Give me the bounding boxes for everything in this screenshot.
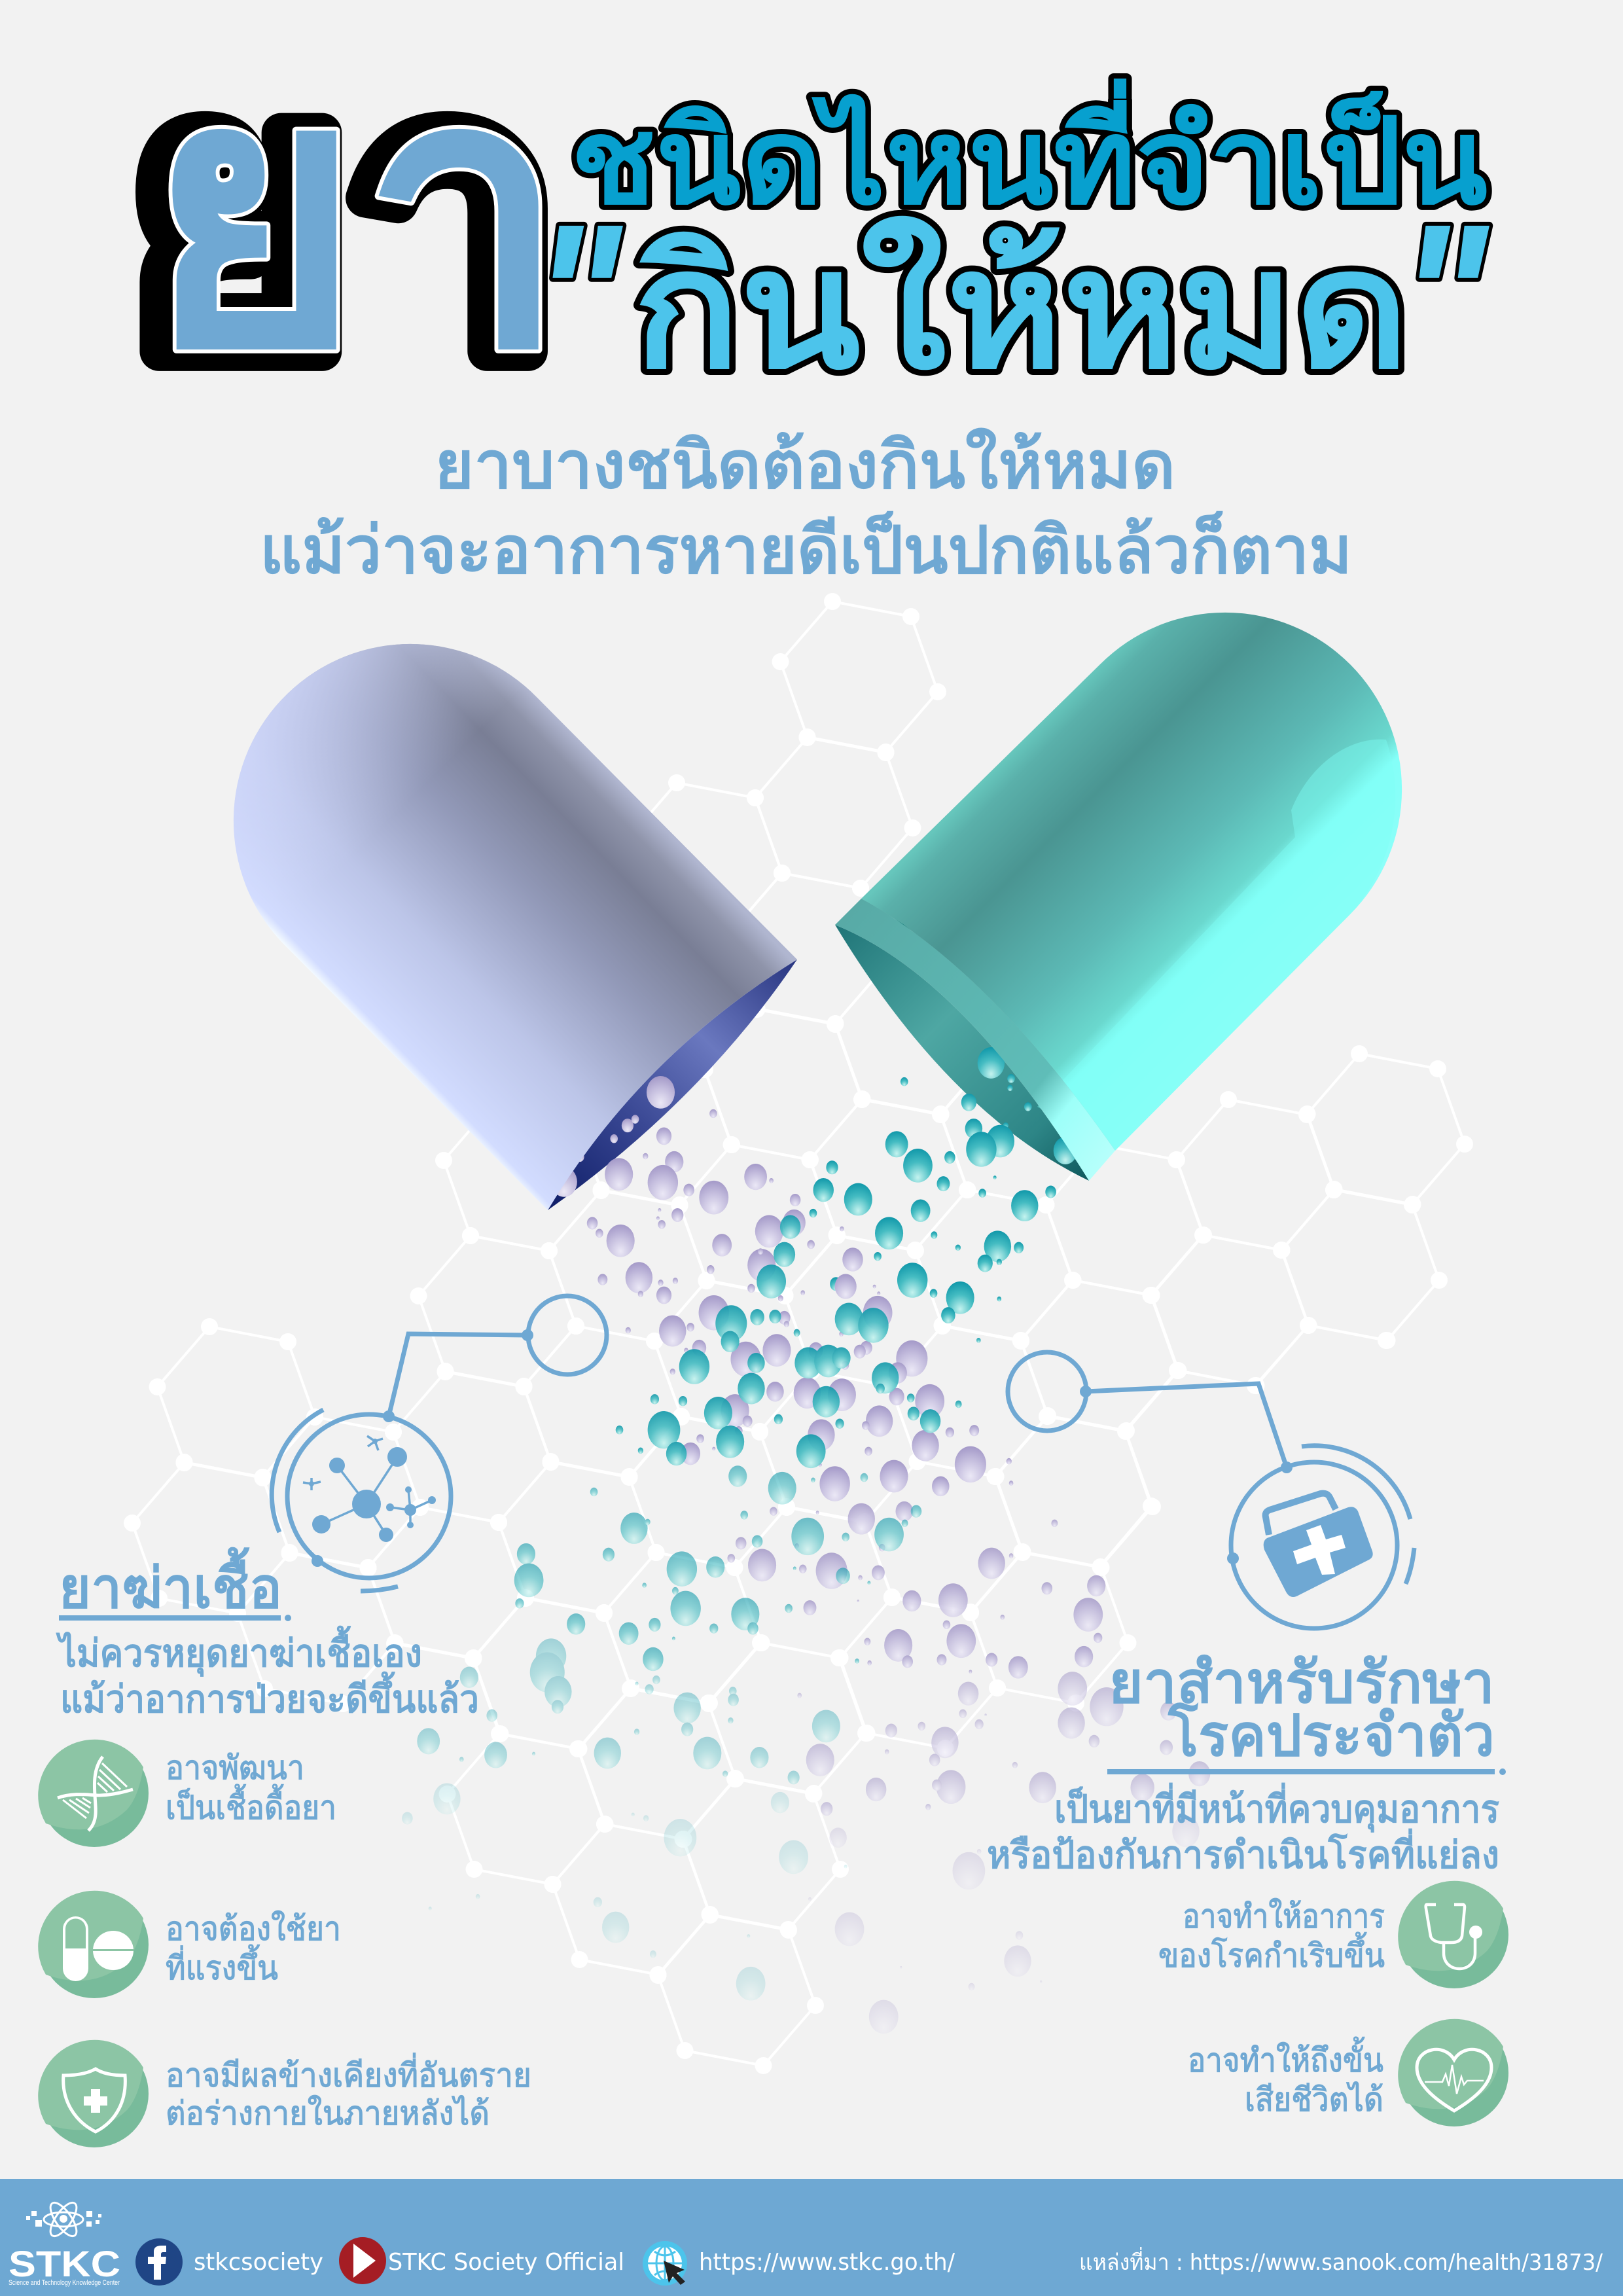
title line 1: ชนิดไหนที่จำเป็น — [571, 79, 1488, 228]
icon: globe cursor — [643, 2241, 687, 2286]
panel: chronic disease medicine — [987, 1650, 1508, 2126]
text: drug resistance: อาจพัฒนา — [166, 1749, 304, 1786]
heading: chronic disease medicine: ยาสำหรับรักษา — [1109, 1650, 1495, 1715]
text: symptoms worsen: ของโรคกำเริบขึ้น — [1158, 1932, 1385, 1974]
heading: chronic disease medicine — [1107, 1650, 1506, 1775]
logo: STKC atom — [26, 2199, 101, 2240]
icon: stethoscope — [1398, 1881, 1508, 1988]
heading: chronic disease medicine: โรคประจำตัว — [1168, 1702, 1495, 1768]
text: stronger medicine: ที่แรงขึ้น — [166, 1945, 278, 1986]
text: symptoms worsen: อาจทำให้อาการ — [1183, 1898, 1385, 1935]
hexagon molecular network background — [124, 593, 1473, 2074]
text: website: https://www.stkc.go.th/ — [699, 2249, 955, 2276]
title — [129, 7, 1489, 425]
teal bubbles, top cluster — [810, 1047, 1077, 1323]
text: side effects: อาจมีผลข้างเคียงที่อันตราย — [166, 2053, 531, 2094]
purple bubbles, most faded — [808, 1816, 1200, 2034]
purple bubbles, faded — [797, 1672, 1210, 1816]
purple bubbles, top cluster — [551, 1076, 1013, 1501]
description: antibiotics — [55, 1626, 479, 1721]
description: antibiotics: ไม่ควรหยุดยาฆ่าเชื้อเอง — [55, 1626, 422, 1677]
teal bubbles, faded — [417, 1638, 840, 1784]
description: chronic disease medicine — [987, 1782, 1499, 1876]
text: may be fatal: อาจทำให้ถึงขั้น — [1188, 2037, 1383, 2079]
teal bubbles overlapping purple — [616, 1215, 981, 1468]
icon: shield — [38, 2040, 149, 2147]
text: symptoms worsen — [1158, 1898, 1385, 1974]
icon: dna — [38, 1740, 149, 1847]
text: STKC Society Official: STKC Society Official — [388, 2249, 624, 2276]
opening quote: " — [533, 180, 623, 414]
icon: heart with pulse — [1398, 2019, 1508, 2126]
teal bubbles, middle — [514, 1465, 921, 1671]
text: drug resistance: เป็นเชื้อดื้อยา — [166, 1784, 336, 1826]
description: chronic disease medicine: เป็นยาที่มีหน้าที่ควบคุมอาการ — [1054, 1782, 1499, 1833]
left capsule body, lavender — [234, 644, 797, 1210]
icon: pills — [38, 1891, 149, 1998]
logo: STKC wordmark: STKC — [9, 2243, 120, 2284]
text: may be fatal — [1188, 2037, 1383, 2118]
text: stronger medicine: อาจต้องใช้ยา — [166, 1910, 341, 1947]
big word: ya: ยา — [129, 9, 558, 425]
logo: STKC wordmark: Science and Technology Knowledge Center — [9, 2279, 120, 2287]
description: chronic disease medicine: หรือป้องกันการดำเนินโรคที่แย่ลง — [987, 1828, 1499, 1876]
text: source: แหล่งที่มา : https://www.sanook.com/health/31873/ — [1079, 2247, 1603, 2276]
text: side effects — [166, 2053, 531, 2132]
title line 2: กินให้หมด — [633, 215, 1409, 402]
heading: antibiotics: ยาฆ่าเชื้อ — [59, 1547, 282, 1620]
icon: medical kit badge with connector — [1008, 1352, 1414, 1628]
icon: youtube — [339, 2237, 386, 2284]
subtitle: ยาบางชนิดต้องกินให้หมด — [435, 427, 1175, 502]
text: drug resistance — [166, 1749, 336, 1826]
left capsule interior — [548, 960, 797, 1210]
purple bubbles, middle — [727, 1501, 1105, 1679]
subtitle: แม้ว่าจะอาการหายดีเป็นปกติแล้วก็ตาม — [260, 511, 1352, 587]
text: may be fatal: เสียชีวิตได้ — [1245, 2081, 1383, 2118]
big word: ya: ยา — [147, 7, 567, 423]
text: stronger medicine — [166, 1910, 341, 1986]
teal bubbles, most faded — [402, 1783, 847, 2001]
particles: bubbles falling from capsule — [402, 1047, 1210, 2034]
right capsule body, teal — [835, 613, 1402, 1181]
closing quote: " — [1399, 180, 1489, 414]
icon: facebook — [135, 2238, 183, 2286]
text: stkcsociety: stkcsociety — [194, 2249, 323, 2276]
description: antibiotics: แม้ว่าอาการป่วยจะดีขึ้นแล้ว — [60, 1672, 479, 1721]
footer bar — [0, 2179, 1623, 2296]
text: side effects: ต่อร่างกายในภายหลังได้ — [166, 2095, 490, 2132]
subtitle — [260, 427, 1352, 587]
panel: antibiotics — [38, 1547, 531, 2147]
icon: molecule badge with connector — [272, 1296, 607, 1591]
right capsule interior — [835, 925, 1089, 1181]
